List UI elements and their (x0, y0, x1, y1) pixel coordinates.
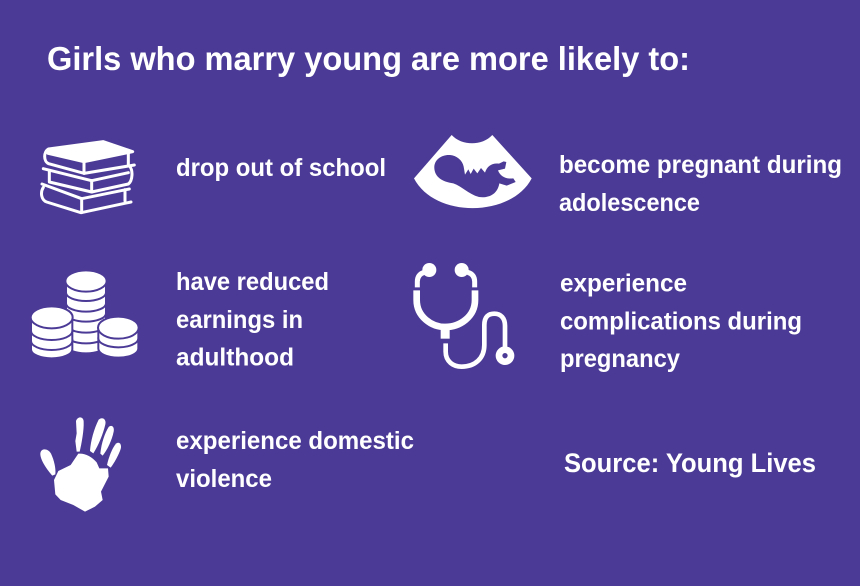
text: drop out of school: drop out of school (176, 154, 386, 182)
text: become pregnant during adolescence (559, 151, 842, 217)
text: experience complications during pregnancy: complications during (560, 308, 802, 336)
text: become pregnant during adolescence: become pregnant during (559, 151, 842, 179)
text: become pregnant during adolescence: adolescence (559, 189, 700, 217)
text: have reduced earnings in adulthood (176, 268, 329, 372)
centre coin stack (65, 270, 107, 353)
text: experience domestic violence: violence (176, 465, 272, 493)
text: experience complications during pregnancy: experience (560, 270, 687, 298)
icon: handprint (40, 417, 121, 512)
text: have reduced earnings in adulthood: earnings in (176, 306, 303, 334)
icon: ultrasound fetus (414, 135, 532, 208)
icon: stethoscope (417, 263, 511, 367)
text: have reduced earnings in adulthood: have reduced (176, 268, 329, 296)
icon: coins (31, 270, 139, 358)
text: experience complications during pregnancy (560, 270, 802, 373)
source: Source: Young Lives (564, 448, 816, 478)
title: Girls who marry young are more likely to: (47, 40, 690, 77)
left coin stack (31, 306, 73, 358)
icon: books (42, 142, 134, 213)
text: experience complications during pregnancy: pregnancy (560, 345, 680, 373)
text: experience domestic violence (176, 427, 414, 493)
text: experience domestic violence: experience domestic (176, 427, 414, 455)
text: have reduced earnings in adulthood: adulthood (176, 344, 294, 372)
right coin stack (98, 317, 139, 358)
